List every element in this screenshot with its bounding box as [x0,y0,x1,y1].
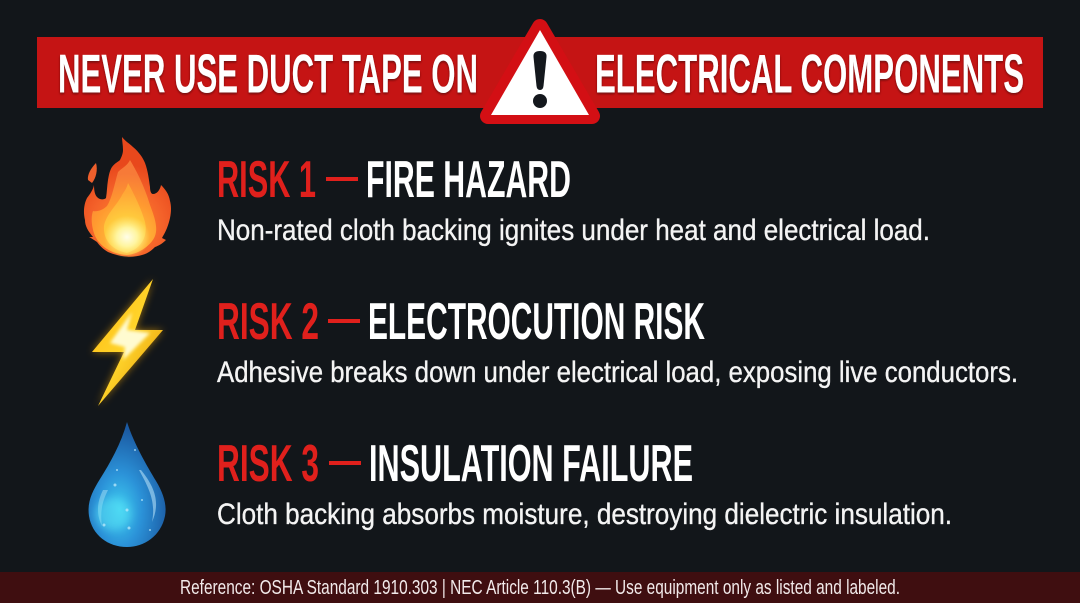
flame inner layer [104,183,146,253]
icon: warning triangle [488,27,592,116]
risk 1 heading [217,151,571,209]
icon: fire [84,137,171,258]
risk 1 heading: RISK 1 [217,151,316,209]
risk 1 [217,151,930,247]
risk 3 description: Cloth backing absorbs moisture, destroying dielectric insulation. [217,498,952,531]
title text left: NEVER USE DUCT TAPE ON [58,42,478,104]
small droplets [102,449,151,531]
risk 2 heading [217,293,705,351]
risk 1 description: Non-rated cloth backing ignites under heat and electrical load. [217,214,930,247]
flame middle layer [92,160,156,255]
drop highlight [139,470,156,522]
risk 3 heading: INSULATION FAILURE [369,435,693,493]
risk 3 [217,435,952,531]
flame ember [88,163,97,183]
flame hot core [104,216,150,258]
risk 1 heading: FIRE HAZARD [366,151,571,209]
risk 2 heading: RISK 2 [217,293,319,351]
risk 3 heading: RISK 3 [217,435,319,493]
risk 2 [217,293,1018,389]
footer band [0,572,1080,603]
title banner [37,37,1043,108]
icon: lightning bolt [92,279,163,406]
risk 2 heading: ELECTROCUTION RISK [368,293,705,351]
icon: water drop [89,422,166,547]
risk 3 heading [217,435,693,493]
